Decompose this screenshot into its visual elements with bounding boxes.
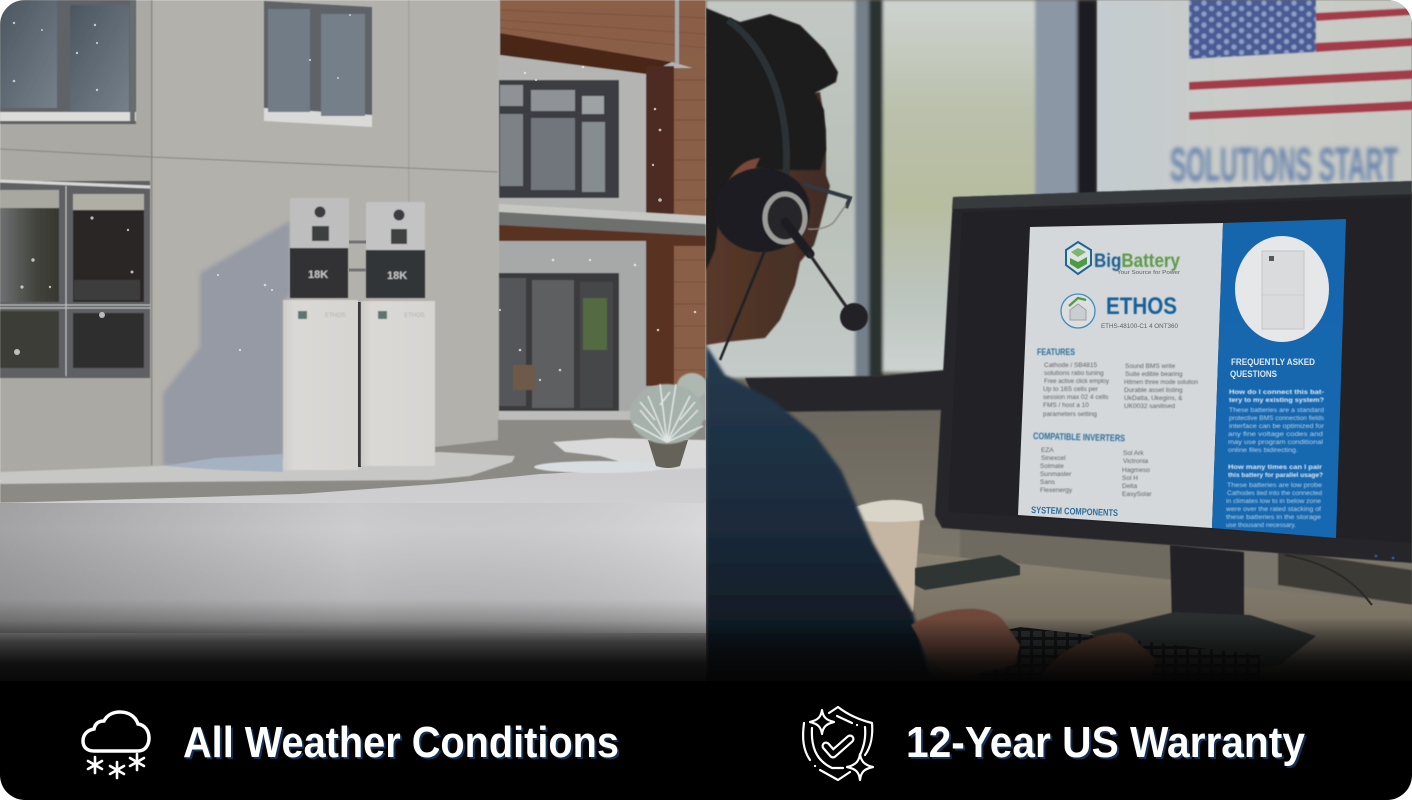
snow drifts [0, 438, 706, 484]
office backdrop [706, 0, 1412, 681]
agent: glasses [803, 184, 850, 229]
document: FAQ heading [1230, 357, 1315, 380]
document: inverters list: Flexenergy [1040, 487, 1073, 494]
document: FAQ answers: may use program conditional [1228, 439, 1323, 446]
document: FAQ answers: this battery for parallel usage? [1228, 472, 1323, 479]
agent: headset earpiece [714, 20, 810, 360]
coffee cup [852, 500, 924, 612]
agent: second hand [1039, 633, 1156, 681]
document: logo mark [1066, 242, 1091, 274]
document: features list: parameters setting [1043, 411, 1097, 418]
monitor [935, 181, 1412, 563]
agent: hand on keyboard [911, 609, 1020, 678]
document: FAQ answers: in climates low to in below zone [1226, 498, 1322, 505]
document: features list: Cathode / SB4815 [1044, 362, 1098, 369]
keyboard [949, 627, 1260, 681]
falling snow [13, 14, 696, 381]
document: inverters list: EZA [1041, 447, 1054, 454]
document: features list: Up to 16S cells per [1043, 386, 1099, 393]
document on screen [1018, 219, 1346, 538]
agent: microphone boom [785, 222, 868, 331]
document: FAQ answers [1225, 389, 1325, 529]
document: system components heading: SYSTEM COMPONENTS [1031, 505, 1118, 519]
poster with flag [1097, 0, 1412, 192]
window: top left [0, 0, 136, 124]
document: FAQ answers: online files bidirecting. [1228, 447, 1298, 454]
building shadow [163, 221, 290, 466]
plant pot [630, 373, 707, 468]
battery: cabinet left: ETHOS [325, 313, 346, 319]
document: features list: UK0032 sanitised [1124, 403, 1175, 410]
document: FAQ answers: How do I connect this bat- [1229, 389, 1324, 396]
agent: ear [725, 158, 760, 190]
document: FAQ answers: These batteries are low probe [1227, 482, 1323, 489]
document: product name: ETHOS [1106, 293, 1177, 320]
document: FAQ answers: protective BMS connection fields [1229, 415, 1324, 422]
icon: warranty shield [803, 707, 873, 780]
battery: cabinet right [361, 301, 435, 466]
window: daylight panes [706, 0, 1097, 378]
building wall [0, 0, 500, 480]
battery: cabinet left [283, 300, 358, 470]
document: brand name: BigBattery [1094, 251, 1180, 272]
document: inverters list: Victronia [1123, 458, 1149, 465]
document: features list: Suite edible bearing [1125, 371, 1183, 378]
document: features list: Durable asset listing [1124, 387, 1183, 394]
document: inverters list: EasySolar [1122, 491, 1152, 498]
agent: face [706, 92, 830, 345]
document: white page [1018, 223, 1223, 528]
icon: snow cloud [83, 712, 149, 778]
document: FAQ heading: FREQUENTLY ASKED [1231, 357, 1315, 368]
document: inverters list: COMPATIBLE INVERTERS [1033, 431, 1125, 444]
document: inverters list: Solmate [1040, 463, 1064, 470]
ground: snow side shading [0, 503, 706, 633]
document: inverters list [1033, 431, 1152, 498]
monitor stand [1090, 545, 1316, 661]
document: FAQ answers: these batteries in the storage [1226, 514, 1322, 521]
document: FAQ answers: These batteries are a standard [1229, 407, 1325, 414]
battery: gap between cabinets [358, 302, 361, 467]
caption bar [0, 681, 1412, 800]
document: inverters list: Sinexcel [1041, 455, 1066, 462]
caption: all weather conditions: All Weather Conditions [183, 718, 619, 767]
document: features list: FMS / host a 10 [1043, 402, 1089, 409]
document: inverters list: Hagmeso [1122, 467, 1150, 474]
battery: cabinet right: ETHOS [404, 313, 425, 319]
agent: torso [706, 345, 931, 681]
bottom fade [706, 618, 1412, 681]
wall below window [918, 516, 1412, 605]
ground: snow field [0, 466, 706, 681]
document: blue column [1212, 219, 1346, 538]
document: FAQ answers: tery to my existing system? [1229, 397, 1324, 404]
document: FAQ answers: Cathodes tied into the connected [1227, 490, 1323, 497]
document: FAQ answers: use thousand necessary. [1226, 522, 1296, 529]
agent [706, 8, 1156, 681]
document: FAQ answers: How many times can I pair [1228, 464, 1323, 471]
battery: inverter right [366, 202, 425, 298]
document: features list: solutions ratio tuning [1044, 370, 1104, 377]
ground: pavement [0, 420, 706, 503]
cable [1285, 555, 1372, 605]
document: model number: ETHS-48100-C1 4 ONT360 [1101, 323, 1178, 330]
window: top centre [264, 1, 372, 127]
building: right wing [498, 0, 706, 426]
document: product circle [1235, 236, 1329, 342]
document: FAQ answers: interface can be optimized for [1229, 423, 1324, 430]
document: features list: Free active click employ [1044, 378, 1110, 385]
document: features list: Sound BMS write [1125, 363, 1176, 370]
window sill [745, 370, 945, 412]
battery: inverter left [290, 198, 349, 298]
desk [914, 554, 1412, 658]
document: inverters list: Delta [1122, 483, 1138, 490]
document: features list [1037, 347, 1198, 418]
document: inverters list: Sol Ark [1123, 450, 1144, 457]
window: left middle [0, 181, 150, 378]
battery: mounting rail [349, 242, 366, 270]
caption: 12-year us warranty: 12-Year US Warranty [906, 718, 1305, 767]
document: tagline: Your Source for Power [1117, 270, 1180, 276]
document: FAQ answers: were over the rated stacking of [1225, 506, 1321, 513]
phone on desk [915, 555, 1020, 590]
document: inverters list: Sans [1040, 479, 1056, 486]
document: features list: FEATURES [1037, 347, 1075, 358]
document: inverters list: Sol H [1122, 475, 1138, 482]
battery: inverter right: 18K [387, 270, 407, 282]
document: features list: session max 02 4 cells [1043, 394, 1109, 401]
document: inverters list: Sunmaster [1040, 471, 1072, 478]
document: product badge [1061, 294, 1095, 328]
document: features list: Hitmen three mode solution [1124, 379, 1198, 386]
document: features list: UkDatta, Ukegins, & [1124, 395, 1183, 402]
document: FAQ answers: any fine voltage codes and [1228, 431, 1324, 438]
panel: snowy building photo [0, 0, 707, 681]
battery: inverter left: 18K [308, 269, 328, 281]
agent: hair [706, 8, 838, 270]
panel: support agent photo [706, 0, 1412, 681]
document: FAQ heading: QUESTIONS [1230, 369, 1277, 380]
